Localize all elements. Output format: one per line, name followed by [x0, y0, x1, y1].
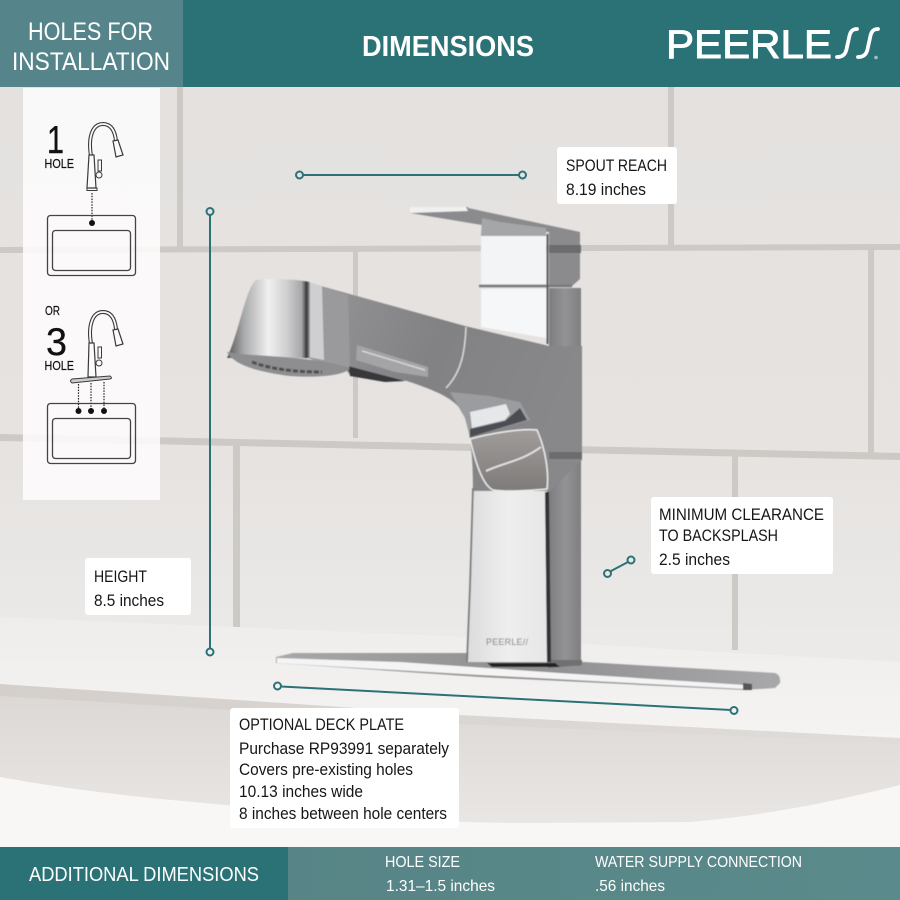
dimension line: deck plate — [274, 682, 738, 714]
spray head band — [308, 282, 350, 372]
dimension line: height — [206, 208, 214, 656]
label: 1 hole: 1 — [47, 119, 64, 162]
panel: install holes — [23, 88, 160, 500]
callout: height: 8.5 inches — [94, 591, 164, 610]
footer item: hole size: 1.31–1.5 inches — [386, 878, 495, 895]
faucet photo — [227, 207, 780, 690]
dimension line: spout reach — [296, 172, 526, 178]
faucet column side — [549, 288, 581, 666]
neck reflection — [470, 430, 548, 491]
background: tiled wall — [0, 80, 900, 670]
spray face — [227, 352, 350, 377]
footer band — [0, 847, 900, 900]
header band — [0, 0, 900, 87]
callout: optional deck plate — [230, 708, 459, 828]
handle white blocks — [481, 236, 546, 284]
callout: minimum clearance — [651, 497, 833, 574]
callout: height — [85, 558, 191, 615]
label: 1 hole — [44, 119, 74, 171]
callout: optional deck plate: 10.13 inches wide — [239, 782, 363, 801]
handle cap — [410, 207, 580, 286]
column front — [468, 491, 549, 662]
icon: single hole sink — [48, 193, 136, 276]
deck plate — [276, 653, 780, 690]
dimension line: backsplash clearance — [604, 556, 634, 577]
callout: optional deck plate: OPTIONAL DECK PLATE — [239, 715, 404, 734]
neck chrome highlights — [450, 392, 530, 437]
callout: minimum clearance: MINIMUM CLEARANCE — [659, 505, 824, 524]
callout: spout reach: 8.19 inches — [566, 180, 646, 199]
heading: holes for installation — [12, 18, 170, 76]
callout: spout reach: SPOUT REACH — [566, 156, 667, 175]
spout body and neck — [310, 283, 582, 492]
label: or 3 hole: HOLE — [44, 358, 74, 373]
heading: holes for installation: INSTALLATION — [12, 48, 170, 76]
footer item: water supply connection: WATER SUPPLY CONNECTION — [595, 854, 802, 871]
callout: optional deck plate: Purchase RP93991 separately — [239, 739, 449, 758]
callout: minimum clearance: 2.5 inches — [659, 550, 730, 569]
footer heading: ADDITIONAL DIMENSIONS — [29, 864, 259, 886]
footer item: hole size: HOLE SIZE — [385, 854, 460, 871]
title: DIMENSIONS — [362, 31, 534, 63]
icon: single hole faucet — [87, 124, 123, 190]
label: 1 hole: HOLE — [44, 156, 74, 171]
callout: optional deck plate: 8 inches between hole centers — [239, 804, 447, 823]
icon: three hole sink — [48, 382, 136, 464]
footer item: water supply connection — [595, 854, 802, 895]
callout: optional deck plate: Covers pre-existing holes — [239, 760, 413, 779]
heading: holes for installation: HOLES FOR — [28, 18, 153, 46]
callout: minimum clearance: TO BACKSPLASH — [659, 526, 778, 545]
callout: height: HEIGHT — [94, 567, 147, 586]
footer item: hole size — [385, 854, 495, 895]
icon: three hole faucet with plate — [70, 312, 123, 383]
background: countertop — [0, 617, 900, 848]
spout underside slider — [356, 345, 428, 377]
label: or 3 hole: 3 — [46, 321, 67, 364]
spray head — [227, 279, 310, 358]
label: or 3 hole — [44, 303, 74, 373]
spout seam — [446, 327, 466, 388]
footer item: water supply connection: .56 inches — [595, 878, 665, 895]
label: or 3 hole: OR — [45, 303, 60, 318]
logo: Peerless: PEERLE — [666, 23, 832, 67]
faucet engraved logo: PEERLE// — [486, 637, 528, 647]
callout: spout reach — [557, 147, 677, 204]
